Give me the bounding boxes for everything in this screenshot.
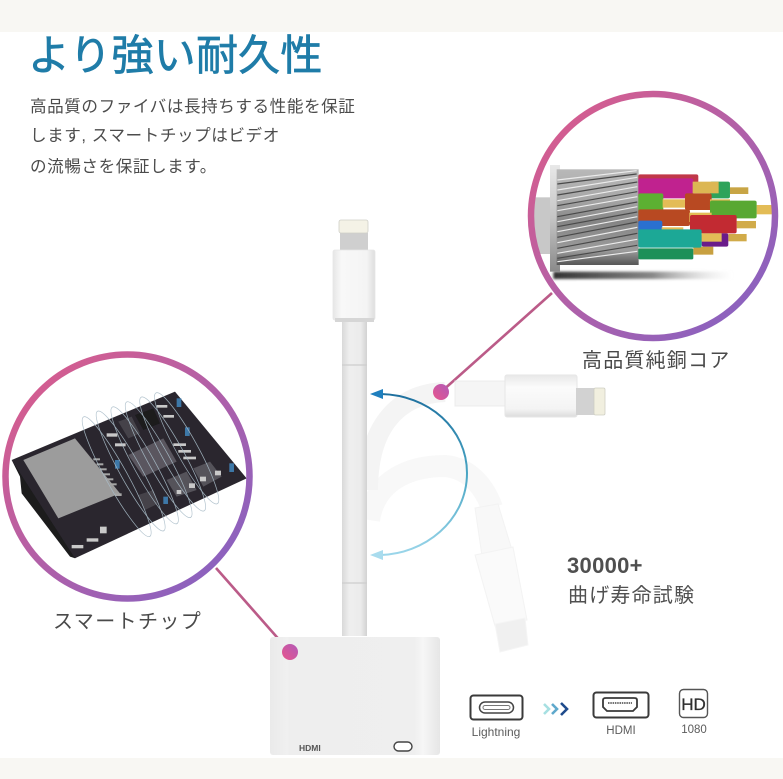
- bend test count: 30000+: [567, 553, 643, 578]
- icon: lightning port: Lightning: [472, 725, 520, 739]
- icon: lightning port: [470, 696, 522, 739]
- icon: HD 1080: 1080: [681, 724, 707, 736]
- faded bent cable: [369, 466, 528, 652]
- lightning port: [394, 742, 412, 751]
- chip illustration: [12, 388, 247, 558]
- bend arrow: [370, 389, 467, 560]
- icon: arrows: [544, 703, 567, 715]
- top band: [0, 0, 783, 32]
- adapter body: [270, 637, 440, 755]
- bottom band: [0, 758, 783, 779]
- coil rings: [74, 388, 227, 542]
- body text: [30, 97, 355, 176]
- dot: smart chip: [282, 644, 298, 660]
- label: smart chip: スマートチップ: [53, 611, 202, 633]
- icon: hdmi port: [594, 692, 648, 737]
- HDMI port label: HDMI: [299, 743, 321, 753]
- body text: の流暢さを保証します。: [30, 157, 217, 176]
- body text: します, スマートチップはビデオ: [30, 125, 280, 145]
- leader line: copper core: [441, 293, 552, 392]
- magnifier circle: copper wire: [531, 94, 775, 338]
- leader line: smart chip: [216, 568, 290, 652]
- dot: copper core: [433, 384, 449, 400]
- icon: hdmi port: HDMI: [606, 725, 636, 737]
- connector housing: [333, 250, 375, 320]
- braided cable: [342, 318, 367, 636]
- icon: HD 1080: HD: [681, 695, 706, 714]
- title: より強い耐久性: [28, 32, 323, 79]
- magnifier circle: smart chip: [6, 354, 250, 598]
- main cable: [333, 220, 375, 636]
- body text: 高品質のファイバは長持ちする性能を保証: [30, 97, 355, 116]
- bend test label: 曲げ寿命試験: [568, 584, 695, 607]
- connector tip: [340, 233, 368, 251]
- label: copper core: 高品質純銅コア: [582, 349, 730, 372]
- upper bent cable: [368, 375, 605, 490]
- wire illustration: [533, 165, 773, 279]
- icon: HD 1080: [680, 690, 708, 736]
